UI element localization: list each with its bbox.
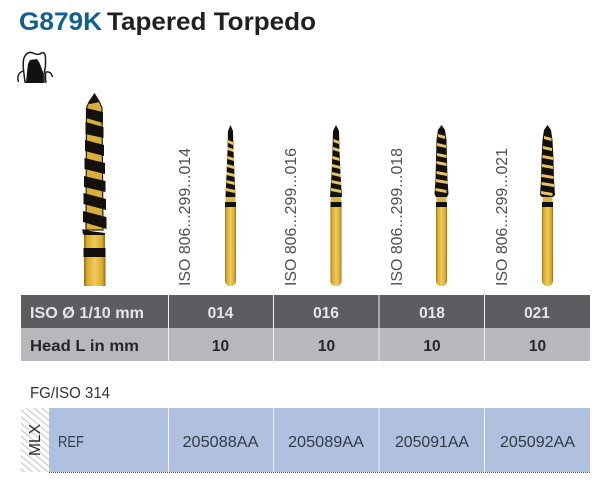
header row: ISO diameter: 021 — [524, 305, 550, 322]
icon: tooth preparation — [18, 52, 52, 83]
header row: ISO diameter: 016 — [313, 305, 339, 322]
ISO label 018: ISO 806...299...018 — [389, 148, 406, 286]
title: G879K — [19, 8, 102, 36]
title: Tapered Torpedo — [107, 8, 316, 36]
row: head length: Head L in mm — [30, 338, 139, 355]
bur column 014 — [177, 125, 236, 286]
REF row: 205091AA — [395, 434, 469, 451]
order table — [21, 408, 591, 472]
row: head length: 10 — [423, 338, 441, 355]
bur 018 — [434, 125, 448, 286]
REF row: 205092AA — [500, 434, 575, 451]
bur 016 — [330, 125, 342, 286]
MLX hatched cell: MLX — [27, 424, 44, 456]
bur 021 — [540, 125, 555, 286]
header row: ISO diameter: 018 — [419, 305, 445, 322]
REF row — [49, 408, 590, 472]
header row: ISO diameter: ISO Ø 1/10 mm — [30, 305, 144, 322]
row: head length: 10 — [529, 338, 546, 355]
header row: ISO diameter — [21, 295, 590, 328]
bur column 018 — [389, 125, 448, 286]
header row: ISO diameter: 014 — [208, 305, 234, 322]
REF row: 205089AA — [288, 434, 364, 451]
bur column 021 — [494, 125, 555, 286]
shank label: FG/ISO 314 — [30, 385, 110, 402]
row: head length — [21, 328, 590, 361]
title — [19, 8, 316, 36]
MLX hatched cell — [21, 408, 49, 472]
spec table — [21, 295, 590, 361]
ISO label 016: ISO 806...299...016 — [283, 148, 300, 286]
large bur illustration — [82, 94, 106, 286]
bur 014 — [225, 125, 236, 286]
ISO label 014: ISO 806...299...014 — [177, 148, 194, 286]
ISO label 021: ISO 806...299...021 — [494, 148, 511, 286]
REF row: 205088AA — [182, 434, 259, 451]
bur column 016 — [283, 125, 342, 286]
row: head length: 10 — [318, 338, 335, 355]
row: head length: 10 — [212, 338, 229, 355]
REF row: REF — [58, 434, 84, 451]
